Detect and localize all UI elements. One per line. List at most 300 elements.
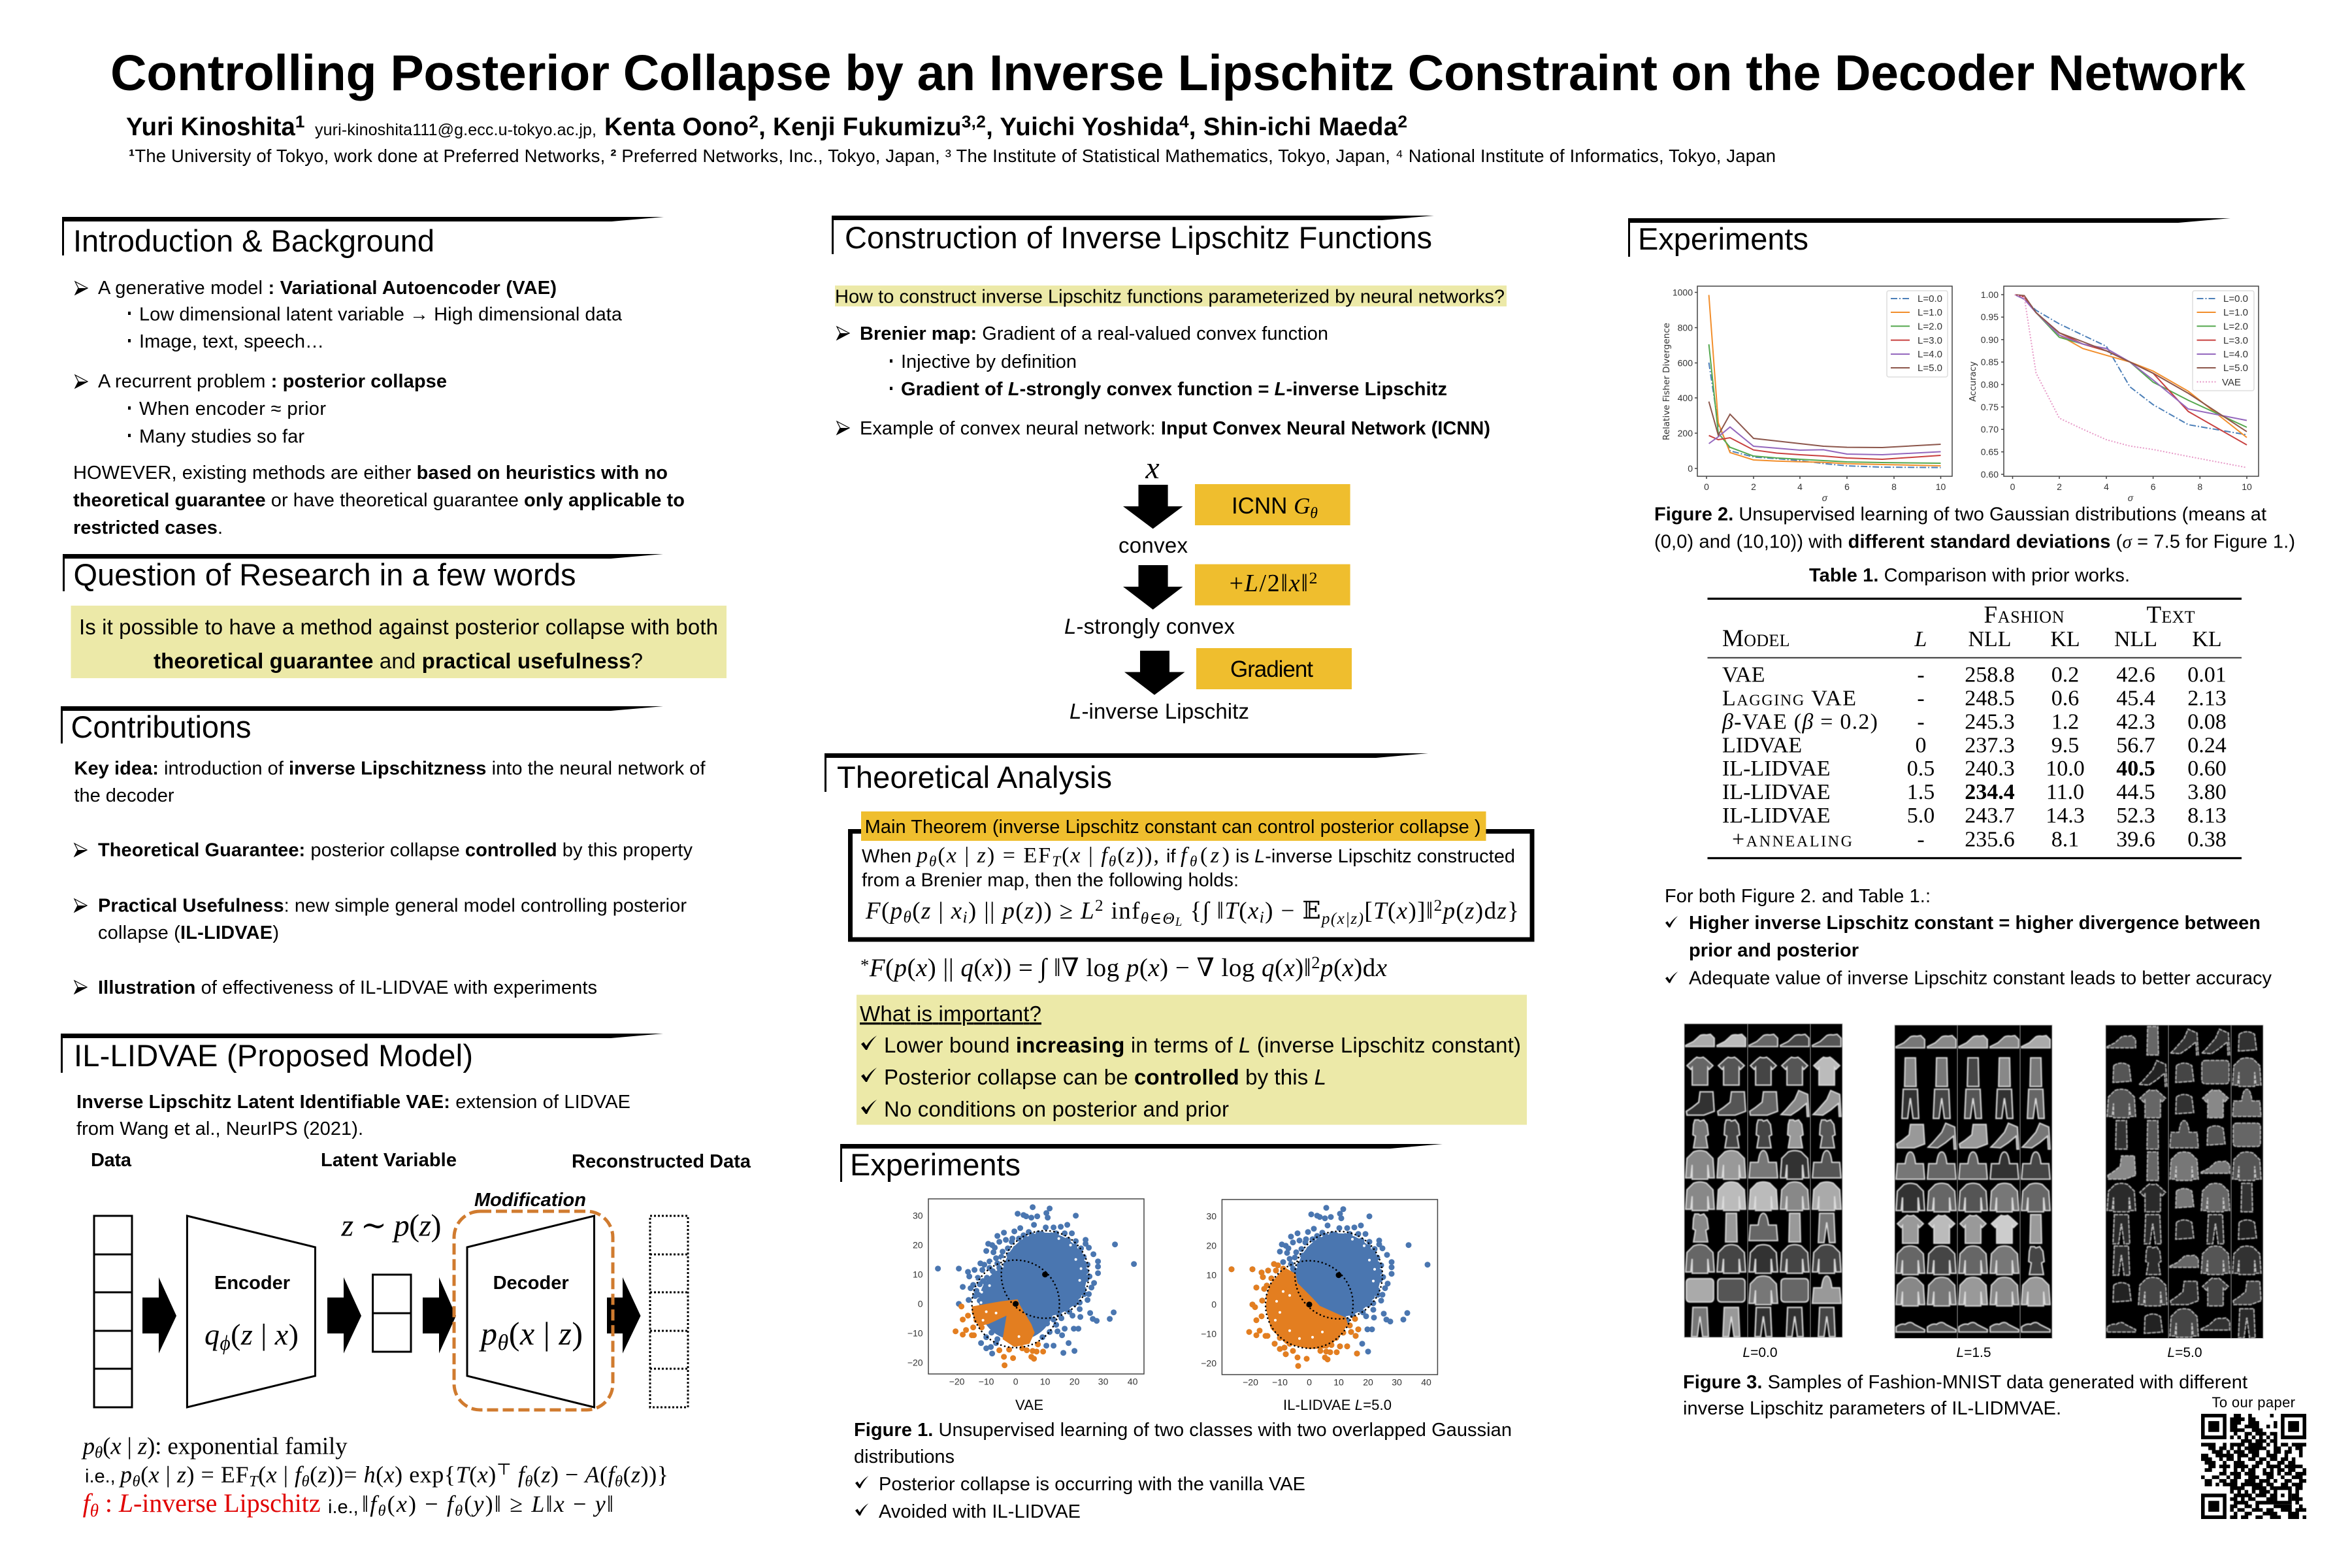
figure 1 caption: Figure 1. Unsupervised learning of two classes with two overlapped Gaussian xyxy=(854,1420,1512,1441)
formulas: exponential family and Lipschitz: ( xyxy=(103,1433,110,1460)
list: Brenier map: Injective by definition xyxy=(901,351,1077,372)
line chart: accuracy: L=1.0 xyxy=(2223,307,2248,318)
encoder block: q xyxy=(204,1318,220,1351)
list: Brenier map: Brenier map: Gradient of a real-valued convex function xyxy=(860,323,1328,344)
encoder block: z | x) xyxy=(241,1318,299,1351)
list: Brenier map xyxy=(837,323,1490,439)
formulas: exponential family and Lipschitz: : xyxy=(99,1488,119,1518)
scatter plot: VAE: 10 xyxy=(1040,1377,1051,1387)
callout: what is important xyxy=(857,995,1527,1125)
table 1: comparison with prior works: KL xyxy=(2050,627,2080,651)
heading: Construction of Inverse Lipschitz Functions: Construction of Inverse Lipschitz Functions xyxy=(845,220,1432,255)
main theorem box: z)), xyxy=(1126,843,1159,868)
flow: ICNN construction xyxy=(1064,451,1352,723)
table 1: comparison with prior works: Fashion xyxy=(1984,602,2065,629)
table 1: comparison with prior works: IL-LIDVAE xyxy=(1722,780,1831,804)
main theorem box: ( xyxy=(912,898,921,924)
flow: ICNN construction: θ xyxy=(1310,505,1318,522)
text: model description xyxy=(76,1092,630,1139)
main theorem box: L xyxy=(1175,916,1182,929)
formulas: exponential family and Lipschitz: ⊤ xyxy=(497,1461,512,1478)
diagram labels xyxy=(91,1150,751,1211)
line chart: accuracy: VAE xyxy=(2222,377,2241,388)
heading: Experiments xyxy=(840,1144,1443,1182)
authors: , Shin-ichi Maeda xyxy=(1189,113,1398,141)
formulas: exponential family and Lipschitz: θ xyxy=(90,1501,99,1520)
table 1: comparison with prior works: KL xyxy=(2192,627,2222,651)
diagram labels: Modification xyxy=(474,1190,586,1211)
line chart: accuracy: 0.85 xyxy=(1981,357,1999,367)
table 1: comparison with prior works: 0.24 xyxy=(2187,733,2227,758)
scatter plot: VAE: 10 xyxy=(913,1269,923,1280)
heading: Experiments: Experiments xyxy=(1638,221,1808,256)
list: generative model xyxy=(75,278,623,352)
affiliations: ¹The University of Tokyo, work done at Preferred Networks, ² Preferred Networks, Inc., Tokyo, Japan, ³ The Institute of Statistical Mathematics, Tokyo, Japan, ⁴ National Institute of Informatics, Tokyo, Japan xyxy=(129,146,1776,166)
line chart: accuracy: 2 xyxy=(2057,482,2062,492)
table 1: comparison with prior works: IL-LIDVAE xyxy=(1722,757,1831,781)
main theorem box: z | x xyxy=(921,898,962,924)
grid captions: L=1.5 xyxy=(1956,1345,1991,1360)
table 1: comparison with prior works: 9.5 xyxy=(2051,733,2079,758)
list: generative model: Low dimensional latent variable → High dimensional data xyxy=(139,304,623,325)
figure 1 caption: Posterior collapse is occurring with the vanilla VAE xyxy=(879,1474,1305,1495)
main theorem box: 2 xyxy=(1095,897,1103,915)
text: key idea: the decoder xyxy=(74,785,174,806)
formulas: exponential family and Lipschitz: L-inverse Lipschitz xyxy=(119,1488,321,1518)
image grid: samples L=5.0 xyxy=(2106,1025,2263,1338)
main theorem box: if xyxy=(1166,846,1176,867)
main theorem box: ) || xyxy=(968,898,1002,924)
list: contribution items: collapse (IL-LIDVAE) xyxy=(98,923,279,943)
heading: Introduction & Background: Introduction & Background xyxy=(73,223,434,258)
figure 3 caption xyxy=(1683,1372,2247,1419)
table 1: comparison with prior works: VAE xyxy=(1722,662,1765,687)
list: posterior collapse: A recurrent problem : posterior collapse xyxy=(98,371,447,392)
line chart: relative Fisher divergence: L=5.0 xyxy=(1918,363,1942,374)
formula: Fisher divergence: (p(x) || q(x)) = ∫ ‖∇ log p(x) − ∇ log q(x)‖ xyxy=(885,954,1311,982)
table 1 caption: Table 1. Comparison with prior works. xyxy=(1809,565,2130,586)
formulas: exponential family and Lipschitz: x | f xyxy=(267,1462,301,1488)
scatter plot: IL-LIDVAE: −10 xyxy=(1272,1377,1288,1388)
formulas: exponential family and Lipschitz xyxy=(81,1433,668,1520)
diagram labels: Data xyxy=(91,1150,132,1171)
main theorem box: ( xyxy=(1062,843,1069,868)
line chart: accuracy: σ xyxy=(2128,493,2134,503)
line chart: accuracy: 1.00 xyxy=(1981,289,1999,300)
table 1: comparison with prior works: - xyxy=(1917,827,1925,852)
scatter plot: IL-LIDVAE: 10 xyxy=(1206,1270,1217,1281)
table 1: comparison with prior works: IL-LIDVAE xyxy=(1722,804,1831,828)
authors: Kenta Oono xyxy=(604,113,749,141)
callout: what is important: No conditions on posterior and prior xyxy=(884,1097,1229,1121)
callout: research question: theoretical guarantee and practical usefulness? xyxy=(154,649,643,673)
scatter plot: VAE: 30 xyxy=(1098,1377,1109,1387)
table 1: comparison with prior works: 45.4 xyxy=(2116,686,2155,711)
main theorem box: ) − 𝔼 xyxy=(1265,898,1321,924)
heading: Experiments xyxy=(1628,218,2230,257)
formulas: exponential family and Lipschitz: ( xyxy=(310,1462,318,1488)
table 1: comparison with prior works xyxy=(1708,598,2242,858)
heading: Experiments: Experiments xyxy=(850,1147,1021,1182)
heading: Theoretical Analysis: Theoretical Analysis xyxy=(837,760,1112,794)
line chart: accuracy: L=3.0 xyxy=(2223,335,2248,346)
flow: ICNN construction: L-inverse Lipschitz xyxy=(1070,699,1249,723)
main theorem box: ( xyxy=(938,843,945,868)
text: key idea: Key idea: introduction of inverse Lipschitzness into the neural network of xyxy=(74,758,706,779)
scatter plot: IL-LIDVAE: −20 xyxy=(1201,1358,1217,1369)
main theorem box: θ∈Θ xyxy=(1141,910,1175,928)
list: posterior collapse: Many studies so far xyxy=(139,426,304,447)
grid captions xyxy=(1742,1345,2202,1360)
heading: Theoretical Analysis xyxy=(825,753,1428,794)
arrow: data to encoder xyxy=(142,1277,176,1354)
formula: latent prior: z ∼ p(z) xyxy=(341,1209,442,1243)
table 1: comparison with prior works: 40.5 xyxy=(2116,757,2155,781)
formula: Fisher divergence: F xyxy=(869,954,886,982)
table 1: comparison with prior works: 3.80 xyxy=(2187,780,2227,804)
main theorem box: T xyxy=(1052,853,1062,870)
text: model description: Inverse Lipschitz Latent Identifiable VAE: extension of LIDVAE xyxy=(76,1092,630,1113)
line chart: accuracy: L=5.0 xyxy=(2223,363,2248,374)
main theorem box: i xyxy=(1260,909,1264,926)
main theorem box: p xyxy=(915,843,928,868)
table 1: comparison with prior works: 1.5 xyxy=(1907,780,1935,804)
authors: Yuri Kinoshita xyxy=(126,113,295,141)
text: however paragraph: HOWEVER, existing methods are either based on heuristics with no xyxy=(73,463,668,483)
table 1: comparison with prior works: 0 xyxy=(1916,733,1926,758)
authors: 1 xyxy=(295,112,304,131)
table 1: comparison with prior works: - xyxy=(1917,686,1925,711)
line chart: relative Fisher divergence: 0 xyxy=(1704,482,1709,492)
table 1: comparison with prior works: 0.38 xyxy=(2187,827,2227,852)
list: contribution items: Practical Usefulness: new simple general model controlling posterior xyxy=(98,895,687,916)
formulas: exponential family and Lipschitz: θ xyxy=(455,1502,463,1520)
authors: , Yuichi Yoshida xyxy=(986,113,1179,141)
formulas: exponential family and Lipschitz: ( xyxy=(387,1491,395,1517)
panel: experiments, middle column xyxy=(840,1144,1512,1522)
title: Controlling Posterior Collapse by an Inverse Lipschitz Constraint on the Decoder Network xyxy=(110,45,2246,101)
diagram labels: Latent Variable xyxy=(321,1150,457,1171)
main theorem box: [ xyxy=(1364,898,1373,924)
line chart: accuracy: Accuracy xyxy=(1968,361,1978,402)
main theorem box: F(p xyxy=(866,898,902,924)
formulas: exponential family and Lipschitz: ( xyxy=(533,1462,541,1488)
encoder block: Encoder xyxy=(214,1273,290,1294)
main theorem box: T(x xyxy=(1224,898,1258,924)
panel: introduction and background xyxy=(62,217,685,538)
table 1: comparison with prior works: 258.8 xyxy=(1965,662,2015,687)
main theorem box: z) xyxy=(1211,843,1230,868)
grid captions: L=0.0 xyxy=(1742,1345,1778,1360)
line chart: relative Fisher divergence: σ xyxy=(1822,493,1828,503)
line chart: accuracy: 0.80 xyxy=(1981,379,1999,389)
formulas: exponential family and Lipschitz: p xyxy=(81,1433,95,1460)
heading: IL-LIDVAE (Proposed Model) xyxy=(61,1034,663,1073)
main theorem box: 2 xyxy=(1434,897,1442,915)
formulas: exponential family and Lipschitz: p xyxy=(118,1462,132,1488)
table 1: comparison with prior works: - xyxy=(1917,710,1925,734)
flow: ICNN construction: convex xyxy=(1119,533,1188,557)
table 1: comparison with prior works: 0.08 xyxy=(2187,710,2227,734)
main theorem box: from a Brenier map, then the following holds: xyxy=(862,870,1239,891)
list: Brenier map: Example of convex neural network: Input Convex Neural Network (ICNN) xyxy=(860,418,1490,439)
formulas: exponential family and Lipschitz: y)‖ ≥ L‖x − y‖ xyxy=(473,1491,613,1517)
line chart: relative Fisher divergence: L=2.0 xyxy=(1918,321,1942,332)
list: contribution items xyxy=(74,840,693,998)
main theorem box: (z)dz} xyxy=(1456,898,1519,924)
formulas: exponential family and Lipschitz: ( xyxy=(623,1462,631,1488)
flow: ICNN construction: x xyxy=(1145,451,1160,485)
main theorem box: p(z)) ≥ L xyxy=(1002,898,1094,924)
figure 3 caption: inverse Lipschitz parameters of IL-LIDMVAE. xyxy=(1683,1398,2061,1419)
panel: construction of inverse Lipschitz functions xyxy=(832,216,1507,723)
table 1: comparison with prior works: 56.7 xyxy=(2116,733,2155,758)
scatter plot: VAE: −20 xyxy=(949,1377,965,1387)
scatter plot: IL-LIDVAE: 30 xyxy=(1392,1377,1402,1388)
line chart: relative Fisher divergence: L=4.0 xyxy=(1918,349,1942,360)
table 1: comparison with prior works: 44.5 xyxy=(2116,780,2155,804)
table 1: comparison with prior works: 0.2 xyxy=(2051,662,2079,687)
line chart: accuracy: 0.75 xyxy=(1981,402,1999,412)
table 1: comparison with prior works: 235.6 xyxy=(1965,827,2015,852)
line chart: accuracy: 0.60 xyxy=(1981,469,1999,480)
main theorem box: {∫ ‖ xyxy=(1183,898,1224,925)
table 1: comparison with prior works: 0.01 xyxy=(2187,662,2227,687)
scatter plot: VAE: −10 xyxy=(979,1377,994,1387)
table 1: comparison with prior works: 0.60 xyxy=(2187,757,2227,781)
table 1: comparison with prior works: +annealing xyxy=(1732,827,1852,852)
scatter plot: IL-LIDVAE: −20 xyxy=(1243,1377,1258,1388)
table 1: comparison with prior works: 52.3 xyxy=(2116,804,2155,828)
formulas: exponential family and Lipschitz: f xyxy=(518,1462,528,1488)
grid captions: L=5.0 xyxy=(2167,1345,2202,1360)
line chart: accuracy: 0.65 xyxy=(1981,447,1999,457)
plot captions xyxy=(1015,1397,1392,1413)
line chart: relative Fisher divergence: 8 xyxy=(1891,482,1897,492)
line chart: accuracy xyxy=(1968,286,2259,503)
line chart: accuracy: 6 xyxy=(2151,482,2156,492)
text: however paragraph: restricted cases. xyxy=(73,517,223,538)
main theorem box: ( xyxy=(1117,843,1125,868)
panel: question of research xyxy=(63,554,727,678)
scatter plot: VAE: 0 xyxy=(1013,1377,1019,1387)
formula: Fisher divergence: (x)dx xyxy=(1333,954,1387,982)
formulas: exponential family and Lipschitz: θ xyxy=(95,1444,103,1462)
formulas: exponential family and Lipschitz: θ xyxy=(133,1473,140,1490)
line chart: relative Fisher divergence: 600 xyxy=(1678,358,1693,368)
table 1: comparison with prior works: L xyxy=(1914,627,1927,651)
main theorem box: x | f xyxy=(1070,843,1107,868)
main theorem box: x | z) = EF xyxy=(947,843,1051,868)
list: posterior collapse: When encoder ≈ prior xyxy=(139,399,326,419)
scatter plot: IL-LIDVAE: 10 xyxy=(1333,1377,1344,1388)
plot captions: IL-LIDVAE L=5.0 xyxy=(1283,1397,1392,1413)
text: findings: For both Figure 2. and Table 1.: xyxy=(1665,886,1931,907)
table 1: comparison with prior works: β-VAE (β = 0.2) xyxy=(1722,710,1878,734)
text: however paragraph xyxy=(73,463,685,538)
line chart: relative Fisher divergence: 200 xyxy=(1678,428,1693,438)
plot captions: VAE xyxy=(1015,1397,1043,1413)
line chart: relative Fisher divergence: 0 xyxy=(1688,463,1693,474)
scatter plot: IL-LIDVAE: 20 xyxy=(1206,1241,1217,1251)
decoder block: Decoder xyxy=(493,1273,569,1294)
decoder block xyxy=(467,1216,595,1407)
formulas: exponential family and Lipschitz: z) − A(f xyxy=(541,1462,614,1488)
line chart: relative Fisher divergence: 400 xyxy=(1678,393,1693,403)
formulas: exponential family and Lipschitz: z))= h(x) exp{T(x) xyxy=(318,1462,496,1488)
scatter plot: IL-LIDVAE: 20 xyxy=(1363,1377,1373,1388)
callout: research question: Is it possible to have a method against posterior collapse with both xyxy=(79,615,718,639)
text: findings: Higher inverse Lipschitz constant = higher divergence between xyxy=(1689,913,2261,934)
table 1: comparison with prior works: 0.5 xyxy=(1907,757,1935,781)
formulas: exponential family and Lipschitz: θ xyxy=(378,1502,385,1520)
table 1: comparison with prior works: 245.3 xyxy=(1965,710,2015,734)
authors: 3,2 xyxy=(962,112,986,131)
main theorem box: Main Theorem (inverse Lipschitz constant can control posterior collapse ) xyxy=(865,817,1481,838)
line chart: relative Fisher divergence: 1000 xyxy=(1673,287,1693,298)
table 1: comparison with prior works: Text xyxy=(2147,602,2195,629)
formulas: exponential family and Lipschitz: θ xyxy=(525,1473,532,1490)
scatter plot: VAE: 20 xyxy=(913,1240,923,1250)
diagram labels: Reconstructed Data xyxy=(572,1151,751,1172)
main theorem box: θ xyxy=(904,909,911,926)
line chart: relative Fisher divergence: L=0.0 xyxy=(1918,293,1942,304)
main theorem box: T(x)]‖ xyxy=(1373,898,1433,924)
table 1: comparison with prior works: Model xyxy=(1722,625,1790,652)
table 1: comparison with prior works: LIDVAE xyxy=(1722,733,1802,758)
authors: 2 xyxy=(749,112,759,131)
main theorem box: θ xyxy=(1109,853,1116,870)
heading: Introduction & Background xyxy=(62,217,664,258)
main theorem box: θ xyxy=(929,853,936,870)
formulas: exponential family and Lipschitz: z))} xyxy=(631,1462,668,1488)
line chart: relative Fisher divergence xyxy=(1661,286,1952,503)
table 1: comparison with prior works: 243.7 xyxy=(1965,804,2015,828)
table 1: comparison with prior works: 2.13 xyxy=(2187,686,2227,711)
decoder block: x | z) xyxy=(520,1315,583,1352)
authors: 2 xyxy=(1397,112,1407,131)
list: Brenier map: Gradient of L-strongly convex function = L-inverse Lipschitz xyxy=(901,379,1447,400)
heading: Contributions: Contributions xyxy=(71,710,251,744)
figure 2 caption: Figure 2. Unsupervised learning of two Gaussian distributions (means at xyxy=(1654,504,2266,525)
line chart: relative Fisher divergence: 2 xyxy=(1751,482,1756,492)
encoder block xyxy=(187,1216,315,1407)
callout: what is important: Posterior collapse can be controlled by this L xyxy=(884,1065,1326,1089)
panel: IL-LIDVAE proposed model xyxy=(61,1034,751,1520)
image grid: samples L=1.5 xyxy=(1895,1025,2052,1338)
figure 3 caption: Figure 3. Samples of Fashion-MNIST data generated with different xyxy=(1683,1372,2247,1393)
arrow: encoder to latent xyxy=(327,1277,361,1354)
scatter plot: VAE: 30 xyxy=(913,1211,923,1221)
flow: ICNN construction: 2 xyxy=(1309,568,1318,587)
main theorem box xyxy=(851,811,1532,939)
formulas: exponential family and Lipschitz: ( xyxy=(258,1462,266,1488)
table 1: comparison with prior works: NLL xyxy=(2114,627,2157,651)
table 1: comparison with prior works: 42.6 xyxy=(2116,662,2155,687)
arrow: latent to decoder xyxy=(423,1277,456,1354)
formulas: exponential family and Lipschitz: x | z): exponential family xyxy=(110,1433,348,1460)
table 1: comparison with prior works: NLL xyxy=(1968,627,2012,651)
text: model description: from Wang et al., NeurIPS (2021). xyxy=(76,1119,363,1139)
scatter plot: IL-LIDVAE: 0 xyxy=(1211,1299,1217,1310)
QR code xyxy=(2201,1414,2306,1519)
flow: ICNN construction: L-strongly convex xyxy=(1064,614,1235,638)
main theorem box: When xyxy=(862,846,911,867)
formulas: exponential family and Lipschitz: x) − f xyxy=(397,1491,453,1517)
line chart: accuracy: 4 xyxy=(2104,482,2109,492)
line chart: accuracy: 10 xyxy=(2242,482,2252,492)
callout: what is important: Lower bound increasing in terms of L (inverse Lipschitz constant) xyxy=(884,1033,1521,1057)
text: key idea xyxy=(74,758,706,806)
main theorem box: is L-inverse Lipschitz constructed xyxy=(1235,846,1515,867)
table 1: comparison with prior works: Lagging VAE xyxy=(1722,686,1856,711)
formulas: exponential family and Lipschitz: ‖f xyxy=(362,1491,376,1517)
scatter plot: IL-LIDVAE: 30 xyxy=(1206,1211,1217,1222)
scatter plot: VAE: −10 xyxy=(907,1328,923,1339)
list: generative model: Image, text, speech… xyxy=(139,331,324,352)
table 1: comparison with prior works: 240.3 xyxy=(1965,757,2015,781)
authors: , Kenji Fukumizu xyxy=(759,113,961,141)
main theorem box: θ xyxy=(1190,853,1197,870)
line chart: relative Fisher divergence: L=3.0 xyxy=(1918,335,1942,346)
list: generative model: A generative model : Variational Autoencoder (VAE) xyxy=(98,278,557,299)
list: posterior collapse xyxy=(75,371,447,447)
table 1: comparison with prior works: 10.0 xyxy=(2046,757,2085,781)
scatter plot: VAE xyxy=(907,1199,1144,1387)
line chart: relative Fisher divergence: Relative Fisher Divergence xyxy=(1661,323,1672,440)
icon: data vector xyxy=(94,1216,132,1407)
formulas: exponential family and Lipschitz: ( xyxy=(140,1462,148,1488)
figure 1 caption xyxy=(854,1420,1512,1522)
formulas: exponential family and Lipschitz: i.e., xyxy=(328,1497,359,1518)
main theorem box: ( xyxy=(1200,843,1207,868)
callout: research question xyxy=(71,606,727,678)
list: contribution items: Illustration of effectiveness of IL-LIDVAE with experiments xyxy=(98,977,597,998)
formula: Fisher divergence: * xyxy=(860,955,869,975)
scatter plot: IL-LIDVAE xyxy=(1201,1200,1437,1388)
main theorem box: p(x|z) xyxy=(1320,910,1364,928)
figure 1 caption: Avoided with IL-LIDVAE xyxy=(879,1501,1081,1522)
icon: reconstructed vector xyxy=(650,1216,688,1407)
authors xyxy=(126,112,1407,141)
table 1: comparison with prior works: 8.1 xyxy=(2051,827,2079,852)
formulas: exponential family and Lipschitz: θ xyxy=(615,1473,623,1490)
line chart: accuracy: L=2.0 xyxy=(2223,321,2248,332)
callout: what is important: What is important? xyxy=(860,1002,1041,1026)
line chart: accuracy: 0 xyxy=(2010,482,2016,492)
scatter plot: VAE: −20 xyxy=(907,1358,923,1368)
line chart: relative Fisher divergence: 800 xyxy=(1678,323,1693,333)
line chart: relative Fisher divergence: 4 xyxy=(1797,482,1803,492)
line chart: accuracy: L=4.0 xyxy=(2223,349,2248,360)
panel: theoretical analysis xyxy=(825,753,1532,1125)
line chart: accuracy: L=0.0 xyxy=(2223,293,2248,304)
line chart: accuracy: 0.70 xyxy=(1981,424,1999,434)
formulas: exponential family and Lipschitz: T xyxy=(249,1473,259,1490)
text: findings xyxy=(1665,886,2272,989)
decoder block: p xyxy=(479,1315,497,1352)
formulas: exponential family and Lipschitz: f xyxy=(83,1488,93,1518)
text: findings: prior and posterior xyxy=(1689,940,1859,961)
icon: latent vector xyxy=(373,1275,411,1352)
image grid: samples L=0.0 xyxy=(1684,1024,1842,1337)
scatter plot: VAE: 0 xyxy=(918,1299,923,1309)
line chart: accuracy: 0.90 xyxy=(1981,335,1999,345)
table 1: comparison with prior works: 1.2 xyxy=(2051,710,2079,734)
heading: Contributions xyxy=(61,706,663,744)
table 1: comparison with prior works: 237.3 xyxy=(1965,733,2015,758)
table 1: comparison with prior works: 39.6 xyxy=(2116,827,2155,852)
